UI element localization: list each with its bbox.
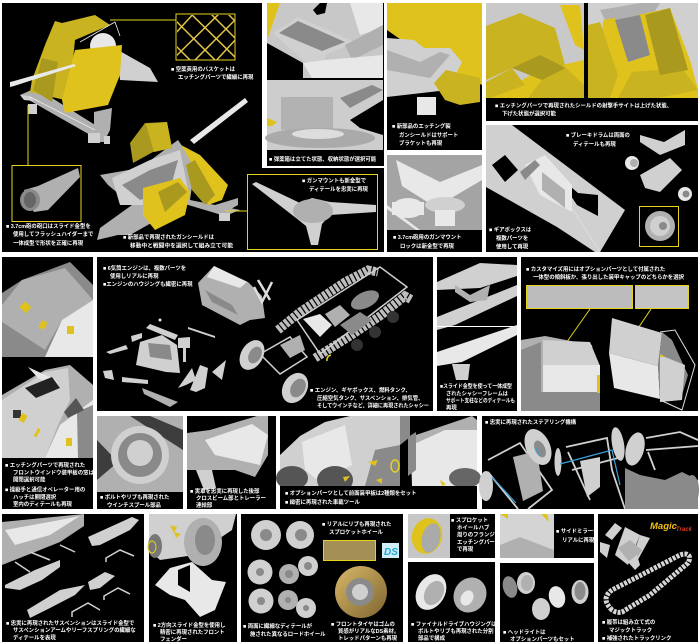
panel: flak gun overview <box>2 3 384 252</box>
panel: chassis frame <box>437 257 517 412</box>
inset: brake drum <box>640 206 678 246</box>
text: flange caption: エッチングパーツ <box>457 538 500 546</box>
icon: Magic Track logo <box>650 521 693 533</box>
text: armor caption: 一体型の傾斜板か、張り出した装甲キャップのどちらかを選択 <box>533 273 685 281</box>
panel: steering mechanism <box>479 416 699 509</box>
text: options caption: ■ オプションパーツとして前面装甲板は2種類をセット <box>285 489 416 497</box>
inset: muzzle flash hider <box>12 166 81 222</box>
icon: DS logo <box>382 543 399 558</box>
panel: ammo box photos <box>265 3 384 166</box>
text: sight caption: ■ エッチングパーツで再現されたシールドの射撃手サイトは上げた状態、 <box>495 102 672 110</box>
text: brake caption: ディテールも再現 <box>573 140 616 148</box>
text: mirror caption <box>556 528 598 544</box>
text: chassis caption: 圧縮空気タンク、サスペンション、排気管、 <box>317 394 424 402</box>
panel: engine and chassis <box>97 257 433 411</box>
icon: DS logo: DS <box>384 547 398 558</box>
text: final drive caption: ■ ファイナルドライブハウジングは <box>411 620 497 628</box>
illustration: gun with shield, travel view <box>10 15 158 144</box>
inset: tire texture <box>324 540 376 560</box>
text: fender caption <box>153 621 225 643</box>
photo: ammo box stowed <box>267 3 383 78</box>
text: frame caption: ■スライド金型を使って一体成型 <box>440 382 513 390</box>
text: fender caption: 精密に再現されたフロント <box>160 628 225 636</box>
text: frame caption: サポート支柱などのディテールも <box>446 396 515 404</box>
inset: gun mount: ■ ガンマウントも新金型で <box>302 176 367 184</box>
illustration: steering views <box>479 425 699 509</box>
illustration: half-track chassis <box>234 267 412 408</box>
text: fender caption: フェンダー <box>160 635 187 643</box>
text: gearbox caption: ■ ギアボックスは <box>489 226 532 234</box>
illustration: detached armor <box>609 318 695 410</box>
text: chassis caption: ■ エンジン、ギヤボックス、燃料タンク、 <box>310 386 411 394</box>
text: headlights caption <box>503 629 575 643</box>
text: gearbox caption <box>489 226 532 250</box>
illustration: exploded engine parts <box>103 318 226 407</box>
text: tire caption: トレッドパターンも再現 <box>338 634 398 642</box>
text: headlights caption: ■ ヘッドライトは <box>503 629 546 636</box>
text: sight caption <box>495 102 672 118</box>
text: muzzle caption <box>6 222 94 247</box>
text: suspension caption: ■ 忠実に再現されたサスペンションはスライド金型で <box>6 619 135 627</box>
text: frame caption: されたシャシーフレームは <box>446 390 509 398</box>
text: options caption: ■ 緻密に再現された車載ツール <box>285 498 360 506</box>
inset: armor plate B <box>636 286 688 308</box>
text: hatches caption: 開閉選択可能 <box>13 476 46 484</box>
panel: front fender <box>148 514 237 643</box>
text: cross beam caption: クロスビーム部とトレーラー <box>196 494 266 502</box>
icon: Magic Track logo: Track <box>676 527 693 533</box>
photo: closed visors <box>2 257 93 357</box>
text: steering caption: ■ 忠実に再現されたステアリング機構 <box>485 418 577 426</box>
text: final drive caption: 部品で構成 <box>418 634 446 642</box>
text: headlights caption: オプションパーツもセット <box>510 636 575 643</box>
illustration: gun with shield, firing view <box>97 98 248 240</box>
text: hatches caption <box>5 461 94 508</box>
illustration: installed armor <box>521 336 600 411</box>
panel: road wheels and tire <box>241 514 403 642</box>
text: engine caption <box>103 264 193 288</box>
text: ammo box caption: ■ 弾薬箱は立てた状態、収納状態が選択可能 <box>269 155 377 163</box>
text: track caption: ■ 補強されたトラックリンク <box>602 634 671 642</box>
text: armor caption: ■ カスタマイズ用にはオプションパーツとして付属された <box>526 265 665 273</box>
text: winch caption: ウインチスプール部品 <box>107 501 162 509</box>
text: bracket caption: ■ 新部品のエッチング製 <box>392 122 451 130</box>
text: wheels caption <box>243 622 326 638</box>
text: hatches caption: ハッチは開閉選択 <box>13 493 57 501</box>
panel: headlights <box>500 563 594 643</box>
text: gearbox caption: 複数パーツを <box>496 234 528 242</box>
text: track caption: ■ 履帯は組み立て式の <box>602 618 655 626</box>
text: final drive caption: ボルトやリブも再現された分割 <box>418 627 494 635</box>
illustration: assembled engine <box>198 266 272 325</box>
illustration: track links <box>600 523 650 570</box>
panel: magic track <box>598 514 698 642</box>
text: mirror caption: リアルに再現 <box>562 537 595 544</box>
panel: final drive housing <box>408 562 497 642</box>
text: brake caption <box>566 131 630 148</box>
text: engine caption: ■ 6気筒エンジンは、複数パーツを <box>103 264 186 272</box>
text: muzzle caption: ■ 3.7cm砲の砲口はスライド金型を <box>6 222 91 230</box>
illustration: brake parts <box>625 130 692 201</box>
text: bracket caption: ガンシールドはサポート <box>399 131 458 139</box>
text: frame caption: 再現 <box>446 404 457 412</box>
photo: sight lowered <box>588 3 698 98</box>
inset: gun mount: ディテールを忠実に再現 <box>309 185 369 193</box>
text: options caption <box>285 489 416 506</box>
text: shield caption: ■ 新部品で再現されたガンシールドは <box>123 233 215 241</box>
panel: etched shield support bracket <box>387 3 482 150</box>
text: tire caption <box>331 620 399 642</box>
text: winch caption: ■ ボルトやリブも再現された <box>100 493 169 501</box>
panel: front armor and tools <box>276 416 481 509</box>
text: suspension caption: サスペンションアームやリーフスプリングの繊細な <box>13 626 136 634</box>
text: tire caption: ■ フロントタイヤはゴムの <box>331 620 395 628</box>
text: track caption <box>602 618 671 642</box>
text: flange caption <box>451 516 501 553</box>
panel: sprocket flange <box>408 514 501 558</box>
text: chassis caption: そしてウインチなど、詳細に再現されたシャシー <box>317 402 429 410</box>
text: bracket caption: ブラケットも再現 <box>399 139 443 147</box>
text: flange caption: ■ スプロケット <box>451 516 488 524</box>
illustration: front tire <box>330 566 403 642</box>
text: mount lock caption: ■ 3.7cm砲用のガンマウント <box>393 233 462 241</box>
icon: Magic Track logo: Magic <box>650 521 678 532</box>
text: cross beam caption: 連結部 <box>196 501 213 509</box>
text: final drive caption <box>411 620 497 642</box>
photo: open hatches <box>2 365 93 458</box>
text: muzzle caption: 一体成型で形状を正確に再現 <box>13 239 84 247</box>
panel: rear cross beam <box>187 416 276 509</box>
text: tire caption: 質感がリアルなDS素材。 <box>338 627 399 635</box>
text: basket caption: ■ 空薬莢用のバスケットは <box>171 65 236 73</box>
text: armor caption <box>526 265 685 281</box>
text: hatches caption: ■ 操縦手と通信オペレーター用の <box>5 486 85 494</box>
text: sprocket caption: スプロケットホイール <box>329 528 384 536</box>
text: chassis caption <box>310 386 429 410</box>
panel: shield gunner sight photos <box>486 3 698 121</box>
panel: gun mount lock <box>387 155 482 252</box>
text: mount lock caption <box>393 233 462 250</box>
illustration: road wheels <box>248 520 318 618</box>
photo: sight raised <box>486 3 584 98</box>
text: sprocket caption: ■ リアルにリブも再現された <box>322 520 391 528</box>
panel: armor cap options <box>521 257 698 411</box>
text: suspension caption <box>6 619 136 642</box>
text: engine caption: ■エンジンのハウジングも繊密に再現 <box>103 280 193 288</box>
text: track caption: マジックトラック <box>609 626 652 634</box>
illustration: chassis frame <box>486 125 625 252</box>
panel: winch spool <box>97 416 183 509</box>
text: sight caption: 下げた状態が選択可能 <box>502 110 557 118</box>
text: muzzle caption: 使用してフラッシュハイダーまで <box>13 230 94 238</box>
text: basket caption: エッチングパーツで繊細に再現 <box>178 73 254 81</box>
panel: side mirror <box>500 514 598 558</box>
text: suspension caption: ディテールを表現 <box>13 634 56 642</box>
text: flange caption: ホイールハブ <box>457 524 490 532</box>
text: hatches caption: フロントウインドウ装甲板の窓は <box>13 468 94 476</box>
text: engine caption: 使用しリアルに再現 <box>110 272 159 280</box>
illustration: assembled track <box>606 554 690 612</box>
inset: gun mount <box>225 174 378 250</box>
text: shield caption <box>123 233 234 250</box>
photo: ammo box raised <box>265 80 383 150</box>
panel: gearbox and brake drums <box>486 125 698 252</box>
icon: basket mesh inset <box>176 14 236 60</box>
text: mirror caption: ■ サイドミラーも <box>556 528 598 535</box>
text: fender caption: ■ 2方向スライド金型を使用し <box>153 621 225 629</box>
text: cross beam caption <box>190 487 266 509</box>
text: shield caption: 移動中と戦闘中を選択して組み立て可能 <box>130 242 234 250</box>
text: winch caption <box>100 493 169 509</box>
text: flange caption: 周りのフランジは <box>457 532 501 538</box>
text: basket caption <box>171 65 254 81</box>
text: hatches caption: 室内のディテールも再現 <box>13 500 73 508</box>
text: bracket caption <box>392 122 458 147</box>
text: wheels caption: 施された異なるロードホイール <box>250 630 326 638</box>
panel: front armor hatches <box>2 257 94 509</box>
text: cross beam caption: ■ 実車を忠実に再現した後部 <box>190 487 260 495</box>
text: frame caption <box>440 382 515 412</box>
text: wheels caption: ■ 両面に繊細なディテールが <box>243 622 313 630</box>
text: sprocket caption <box>322 520 391 536</box>
inset: armor plate A <box>526 286 632 308</box>
text: mount lock caption: ロックは新金型で再現 <box>400 242 455 250</box>
panel: suspension <box>2 514 144 642</box>
text: hatches caption: ■ エッチングパーツで再現された <box>5 461 85 469</box>
text: brake caption: ■ ブレーキドラムは両面の <box>566 131 630 139</box>
text: flange caption: で再現 <box>457 546 474 553</box>
text: gearbox caption: 使用して再現 <box>496 242 529 250</box>
